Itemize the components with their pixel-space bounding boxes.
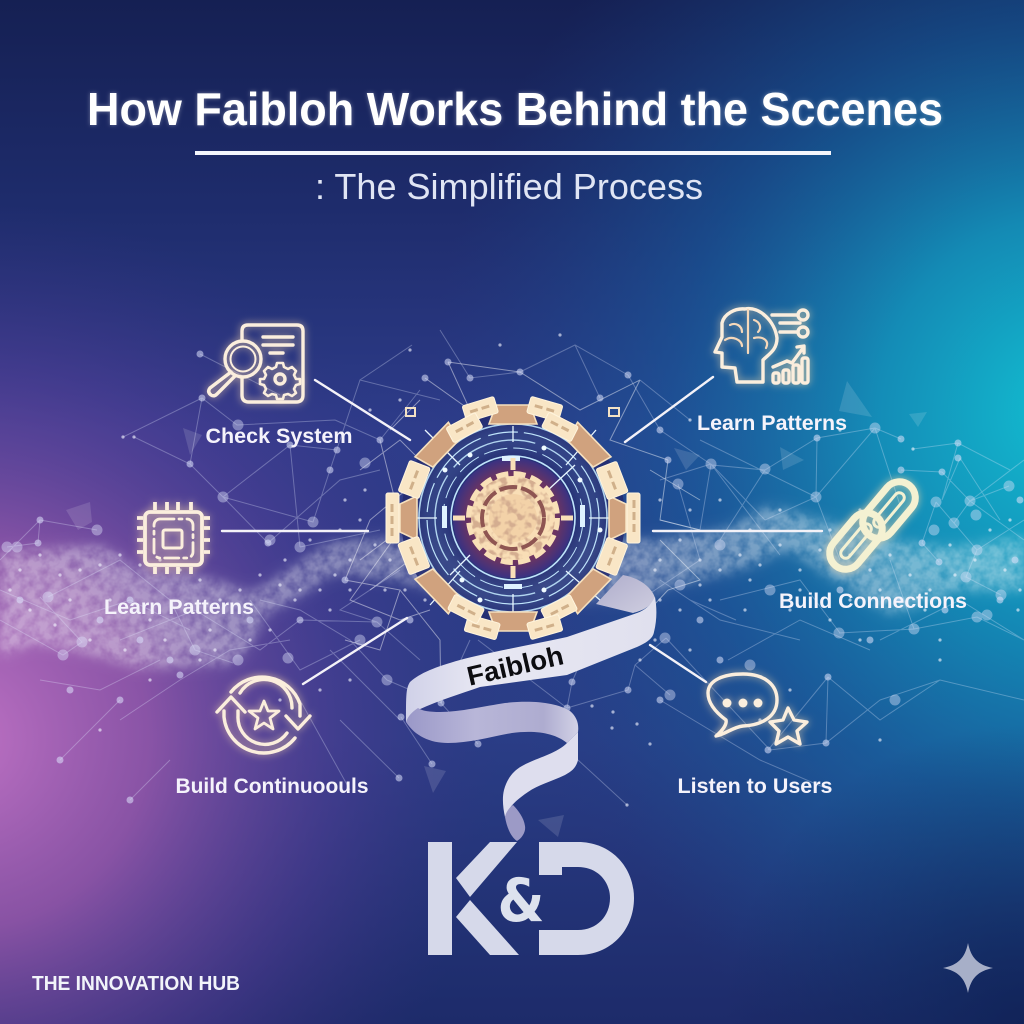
cream segments — [386, 396, 640, 640]
ribbon tail — [505, 805, 525, 841]
large nodes — [7, 425, 1009, 700]
logo: K&D — [428, 842, 634, 955]
core gear — [453, 458, 573, 578]
connector lines — [222, 377, 822, 684]
subtitle: : The Simplified Process — [315, 166, 703, 207]
bright lines around core — [345, 362, 700, 703]
medium nodes — [20, 354, 1020, 800]
label: Listen to Users: Listen to Users — [678, 775, 832, 798]
small square markers — [406, 408, 619, 416]
icon: chat bubble with star — [708, 674, 807, 744]
ring backdrop — [401, 406, 625, 630]
segment details — [392, 405, 634, 631]
label: Check System: Check System — [206, 425, 352, 448]
icon: microchip — [137, 502, 210, 574]
ribbon banner — [406, 597, 656, 841]
label: Build Connections: Build Connections — [779, 590, 967, 613]
brand label: THE INNOVATION HUB — [32, 973, 240, 995]
blue circuit rings — [417, 424, 609, 612]
ribbon label: Faibloh — [464, 640, 566, 692]
icon: four-point sparkle — [943, 943, 993, 993]
icon: brain and growth chart — [715, 309, 808, 383]
network of connected nodes — [0, 330, 1024, 805]
tan segments — [400, 405, 626, 631]
ribbon lower twist — [503, 732, 578, 817]
icon: document with magnifier and gear — [209, 325, 303, 402]
ampersand: & — [498, 866, 544, 936]
central gear ring — [386, 396, 640, 640]
label: Build Continuoouls: Build Continuoouls — [176, 775, 368, 798]
title divider rule — [195, 151, 831, 155]
label: Learn Patterns left: Learn Patterns — [104, 596, 254, 619]
network lines — [0, 330, 1024, 805]
icon: recycle loop with star — [217, 677, 310, 753]
outer ring segments — [386, 396, 640, 640]
small nodes — [10, 335, 1020, 805]
ribbon shaded fold — [406, 702, 578, 743]
title: How Faibloh Works Behind the Sccenes — [87, 83, 943, 135]
decorative translucent triangles — [66, 381, 927, 837]
K letter — [428, 842, 519, 955]
label: Learn Patterns right: Learn Patterns — [697, 412, 847, 435]
mist wave band — [0, 507, 1024, 667]
ribbon front band — [406, 597, 656, 722]
blue sparkles — [425, 448, 600, 600]
icon: chain link — [823, 475, 922, 576]
ribbon back fold — [596, 575, 655, 613]
D letter — [539, 842, 634, 955]
